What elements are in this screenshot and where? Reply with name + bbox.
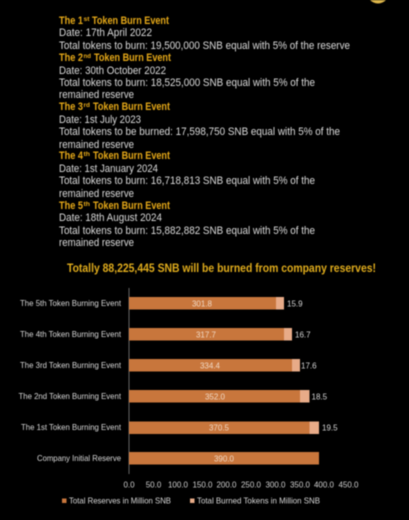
event 3 details: Token Burn Event — [93, 101, 170, 113]
x axis tick labels: 0.0 — [123, 480, 135, 490]
bar: 5th event: 15.9 — [287, 300, 303, 308]
x axis tick labels: 400.0 — [314, 480, 335, 490]
bar: 4th event: 317.7 — [196, 330, 217, 340]
event 1 details — [59, 15, 350, 52]
bar: company initial reserve: 390.0 — [214, 454, 235, 464]
event 2 details: nd — [84, 54, 91, 60]
icon: gold coin cropped at top edge — [366, 0, 390, 4]
x axis tick labels: 150.0 — [192, 480, 213, 490]
bar: company initial reserve: Company Initial Reserve — [37, 454, 121, 463]
event 2 details: Total tokens to burn: 18,525,000 SNB equal with 5% of the — [59, 77, 315, 89]
event 5 details: Token Burn Event — [93, 200, 170, 212]
event 3 details: remained reserve — [59, 139, 134, 151]
bar: 4th event: The 4th Token Burning Event — [20, 330, 122, 339]
event 1 details: Total tokens to burn: 19,500,000 SNB equal with 5% of the reserve — [59, 40, 350, 52]
chart axis line — [128, 288, 130, 474]
event 3 details: Date: 1st July 2023 — [59, 114, 141, 126]
bar: 5th event: The 5th Token Burning Event — [20, 299, 122, 308]
event 2 details: remained reserve — [59, 89, 134, 101]
event 5 details: Total tokens to burn: 15,882,882 SNB equal with 5% of the — [59, 225, 315, 237]
bar: 3rd event — [20, 359, 317, 372]
event 1 details: Token Burn Event — [92, 15, 169, 27]
event 5 details: th — [84, 202, 90, 208]
event 3 details: rd — [84, 103, 90, 109]
x axis tick labels: 300.0 — [265, 480, 286, 490]
bar: 2nd event: 352.0 — [205, 392, 226, 402]
bar: 3rd event: 334.4 — [200, 362, 221, 370]
legend: Total Reserves in Million SNB — [69, 496, 172, 506]
bar: 1st event: 370.5 — [209, 424, 230, 432]
bar: 1st event: The 1st Token Burning Event — [21, 423, 122, 432]
event 4 details: Token Burn Event — [93, 150, 170, 162]
x axis tick labels: 50.0 — [146, 480, 162, 490]
event 1 details: The 1 — [59, 15, 83, 27]
bar: 2nd event — [18, 390, 328, 402]
bar: 3rd event: The 3rd Token Burning Event — [20, 361, 122, 370]
event 5 details — [59, 200, 315, 249]
bar: 3rd event: 17.6 — [301, 362, 317, 370]
event 5 details: Date: 18th August 2024 — [59, 212, 162, 224]
bar: 1st event — [21, 422, 338, 434]
text block: token burn events — [59, 15, 350, 249]
event 2 details: The 2 — [59, 52, 83, 64]
event 4 details: The 4 — [59, 150, 84, 162]
event 2 details: Date: 30th October 2022 — [59, 65, 166, 77]
bar: 4th event — [20, 328, 311, 340]
x axis tick labels — [123, 480, 359, 490]
bar: 4th event: 16.7 — [295, 330, 311, 340]
event 3 details: The 3 — [59, 101, 83, 113]
event 2 details — [59, 52, 315, 101]
x axis tick labels: 350.0 — [290, 480, 311, 490]
bar: 5th event — [20, 297, 303, 310]
bar: 1st event: 19.5 — [322, 424, 338, 432]
event 4 details: remained reserve — [59, 188, 134, 200]
bar: company initial reserve — [37, 452, 319, 464]
event 4 details: Total tokens to burn: 16,718,813 SNB equal with 5% of the — [59, 175, 315, 187]
event 5 details: remained reserve — [59, 237, 134, 249]
bar: 2nd event: 18.5 — [312, 392, 328, 402]
event 2 details: Token Burn Event — [94, 52, 171, 64]
event 4 details: Date: 1st January 2024 — [59, 163, 158, 175]
x axis tick labels: 450.0 — [338, 480, 359, 490]
event 4 details: th — [84, 152, 90, 158]
event 4 details — [59, 150, 315, 200]
bar: 5th event: 301.8 — [192, 300, 213, 308]
bar: 2nd event: The 2nd Token Burning Event — [18, 392, 122, 401]
x axis tick labels: 100.0 — [168, 480, 189, 490]
event 1 details: Date: 17th April 2022 — [59, 27, 152, 39]
bar chart: reserves and burned tokens — [18, 288, 359, 506]
event 3 details: Total tokens to be burned: 17,598,750 SNB equal with 5% of the — [59, 126, 340, 138]
event 3 details — [59, 101, 340, 151]
x axis tick labels: 200.0 — [216, 480, 237, 490]
legend: Total Burned Tokens in Million SNB — [197, 496, 321, 506]
event 1 details: st — [84, 17, 90, 23]
event 5 details: The 5 — [59, 200, 83, 212]
x axis tick labels: 250.0 — [241, 480, 262, 490]
legend — [62, 496, 321, 506]
